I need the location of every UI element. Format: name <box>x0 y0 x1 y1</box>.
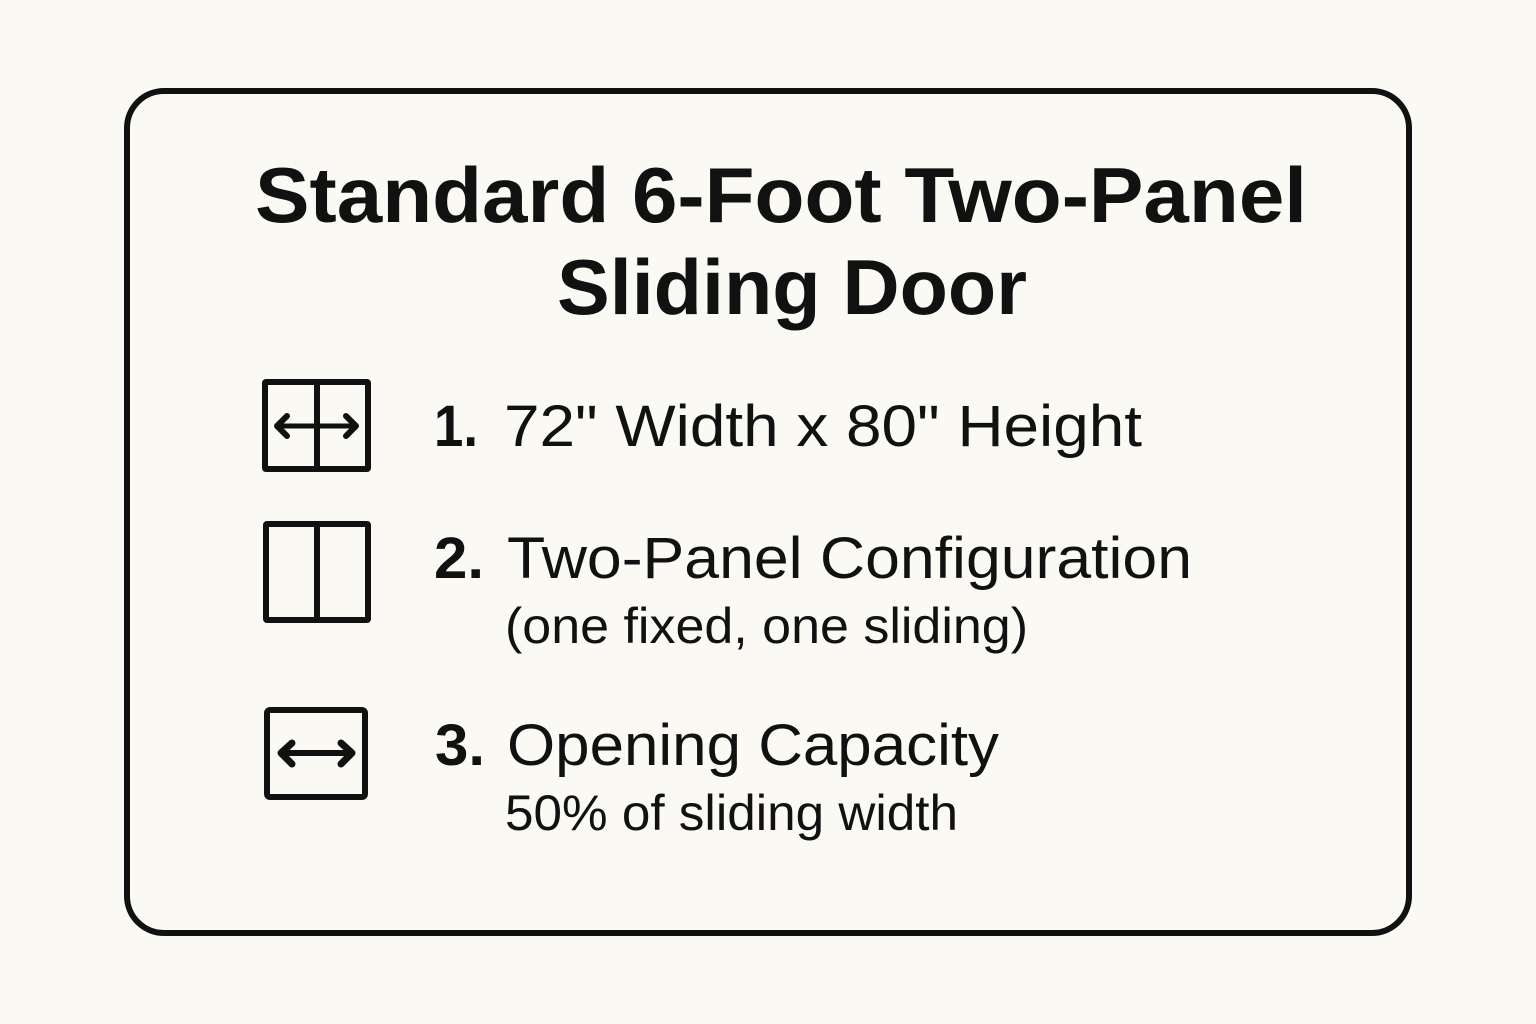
item 1 text: 1. <box>434 394 478 459</box>
item 3 text: 50% of sliding width <box>505 785 958 841</box>
icon: width and height frame with arrows <box>265 382 368 469</box>
item 3 text <box>435 713 999 841</box>
item 3 text: Opening Capacity <box>507 713 999 778</box>
item 1 text: 72" Width x 80" Height <box>504 394 1142 459</box>
title: Standard 6-Foot Two-Panel <box>255 151 1307 239</box>
item 3 text: 3. <box>435 713 485 778</box>
title: Sliding Door <box>557 243 1027 331</box>
item 2 text: (one fixed, one sliding) <box>505 598 1028 654</box>
panel: card outline <box>127 91 1409 933</box>
icon: opening arrow <box>267 710 365 797</box>
item 2 text <box>434 526 1192 654</box>
icon: two-panel door <box>266 524 368 620</box>
item 2 text: 2. <box>434 526 484 591</box>
item 2 text: Two-Panel Configuration <box>507 526 1192 591</box>
title <box>255 151 1307 331</box>
